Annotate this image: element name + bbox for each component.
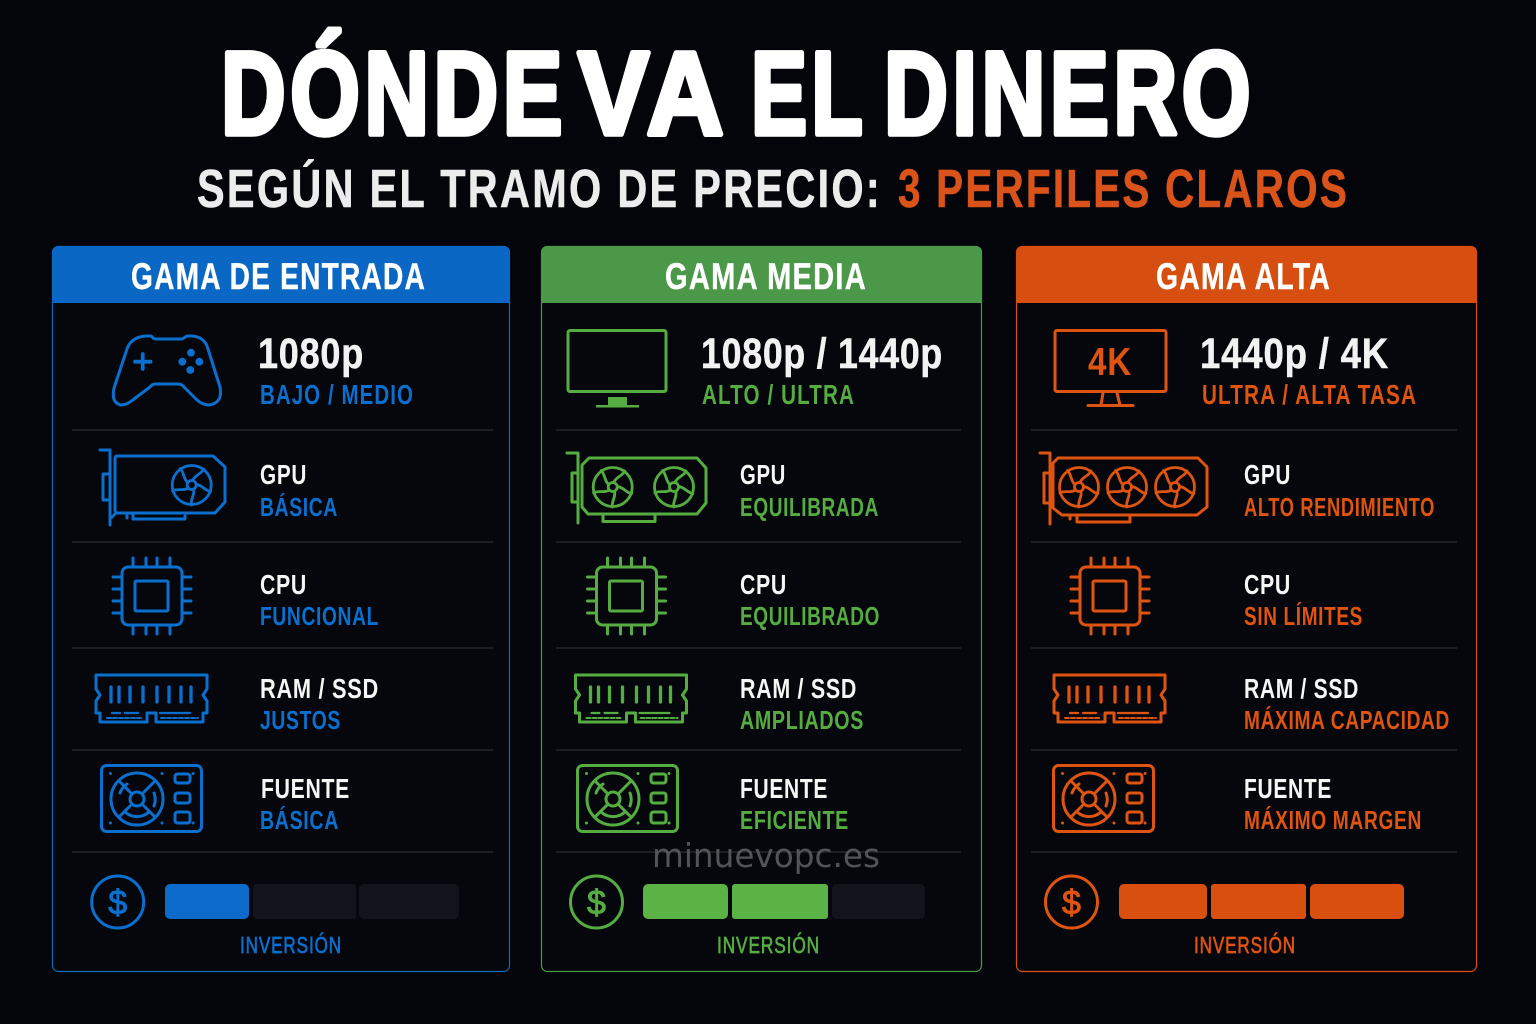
gpu text: GPU <box>740 459 786 490</box>
investment bar: 2 of 3 <box>643 884 925 919</box>
gpu text: GPU <box>260 459 307 490</box>
icon: cpu <box>113 558 191 634</box>
icon: cpu <box>588 558 666 634</box>
icon: dollar <box>570 876 622 928</box>
ram text: MÁXIMA CAPACIDAD <box>1244 705 1450 735</box>
watermark: minuevopc.es <box>652 836 880 875</box>
panel: gama de entrada <box>52 246 510 972</box>
header: gama de entrada <box>52 246 510 303</box>
title <box>221 28 1255 160</box>
investment label: INVERSIÓN <box>1194 932 1296 958</box>
header: gama media <box>541 246 982 303</box>
icon: ram <box>96 675 207 722</box>
power supply text <box>1244 773 1422 835</box>
icon: power supply <box>1054 766 1154 832</box>
header: gama alta: GAMA ALTA <box>1156 256 1331 297</box>
resolution text: BAJO / MEDIO <box>260 379 414 410</box>
cpu text: CPU <box>260 569 307 600</box>
gpu text: GPU <box>1244 459 1291 490</box>
icon: power supply <box>102 766 202 832</box>
icon: gpu three fans <box>1040 453 1207 524</box>
icon: ram <box>1054 675 1165 722</box>
icon: gpu one fan <box>100 450 225 525</box>
ram text: AMPLIADOS <box>740 705 864 735</box>
gpu text: ALTO RENDIMIENTO <box>1244 492 1435 522</box>
icon: dollar: $ <box>587 884 606 922</box>
panel: gama alta <box>1016 246 1477 972</box>
subtitle <box>197 159 1349 219</box>
icon: monitor <box>568 330 666 408</box>
cpu text: SIN LÍMITES <box>1244 601 1363 631</box>
header: gama media: GAMA MEDIA <box>665 256 867 297</box>
cpu text: CPU <box>740 569 787 600</box>
icon: gamepad <box>113 336 221 405</box>
investment bar: 1 of 3 <box>165 884 459 919</box>
power supply text <box>740 773 849 835</box>
cpu text <box>740 569 880 631</box>
icon: gpu two fans <box>567 453 706 523</box>
cpu text <box>260 569 379 631</box>
gpu text <box>740 459 879 522</box>
power supply text <box>260 773 350 835</box>
title: EL <box>751 28 867 160</box>
cpu text: EQUILIBRADO <box>740 601 880 631</box>
investment label: INVERSIÓN <box>240 932 342 958</box>
resolution text: 1440p / 4K <box>1200 330 1389 378</box>
power supply text: FUENTE <box>740 773 828 804</box>
ram text: RAM / SSD <box>740 673 857 704</box>
resolution text: ALTO / ULTRA <box>702 379 855 410</box>
subtitle orange part: 3 PERFILES CLAROS <box>898 159 1349 219</box>
gpu text <box>260 459 338 522</box>
resolution text <box>1200 330 1417 410</box>
ram text <box>1244 673 1450 735</box>
power supply text: FUENTE <box>261 773 350 804</box>
gpu text <box>1244 459 1435 522</box>
power supply text: MÁXIMO MARGEN <box>1244 805 1422 835</box>
power supply text: BÁSICA <box>260 805 339 835</box>
resolution text: 1080p / 1440p <box>701 330 943 378</box>
cpu text: FUNCIONAL <box>260 601 379 631</box>
icon: dollar: $ <box>108 884 127 922</box>
icon: cpu <box>1071 558 1149 634</box>
ram text: RAM / SSD <box>1244 673 1359 704</box>
title: DÓNDE <box>221 28 567 160</box>
icon: 4k monitor: 4K <box>1088 341 1132 384</box>
ram text: JUSTOS <box>260 705 341 735</box>
investment bar: 3 of 3 <box>1119 884 1404 919</box>
header: gama alta <box>1016 246 1477 303</box>
resolution text: ULTRA / ALTA TASA <box>1202 379 1417 410</box>
gpu text: EQUILIBRADA <box>740 492 879 522</box>
icon: dollar <box>1046 876 1098 928</box>
investment label: INVERSIÓN <box>717 932 820 958</box>
icon: power supply <box>578 766 678 832</box>
resolution text <box>258 330 414 410</box>
ram text <box>740 673 864 735</box>
gpu text: BÁSICA <box>260 492 338 522</box>
title: VA <box>578 28 729 160</box>
header: gama de entrada: GAMA DE ENTRADA <box>131 256 426 297</box>
ram text <box>260 673 379 735</box>
power supply text: FUENTE <box>1244 773 1332 804</box>
power supply text: EFICIENTE <box>740 805 849 835</box>
resolution text <box>701 330 943 410</box>
subtitle white part: SEGÚN EL TRAMO DE PRECIO: <box>197 159 882 219</box>
icon: dollar: $ <box>1062 884 1081 922</box>
cpu text <box>1244 569 1363 631</box>
ram text: RAM / SSD <box>260 673 379 704</box>
icon: 4k monitor <box>1055 330 1166 406</box>
cpu text: CPU <box>1244 569 1291 600</box>
panel: gama media <box>541 246 982 972</box>
resolution text: 1080p <box>258 330 364 378</box>
title: DINERO <box>884 28 1255 160</box>
icon: dollar <box>92 876 144 928</box>
icon: ram <box>576 675 686 722</box>
